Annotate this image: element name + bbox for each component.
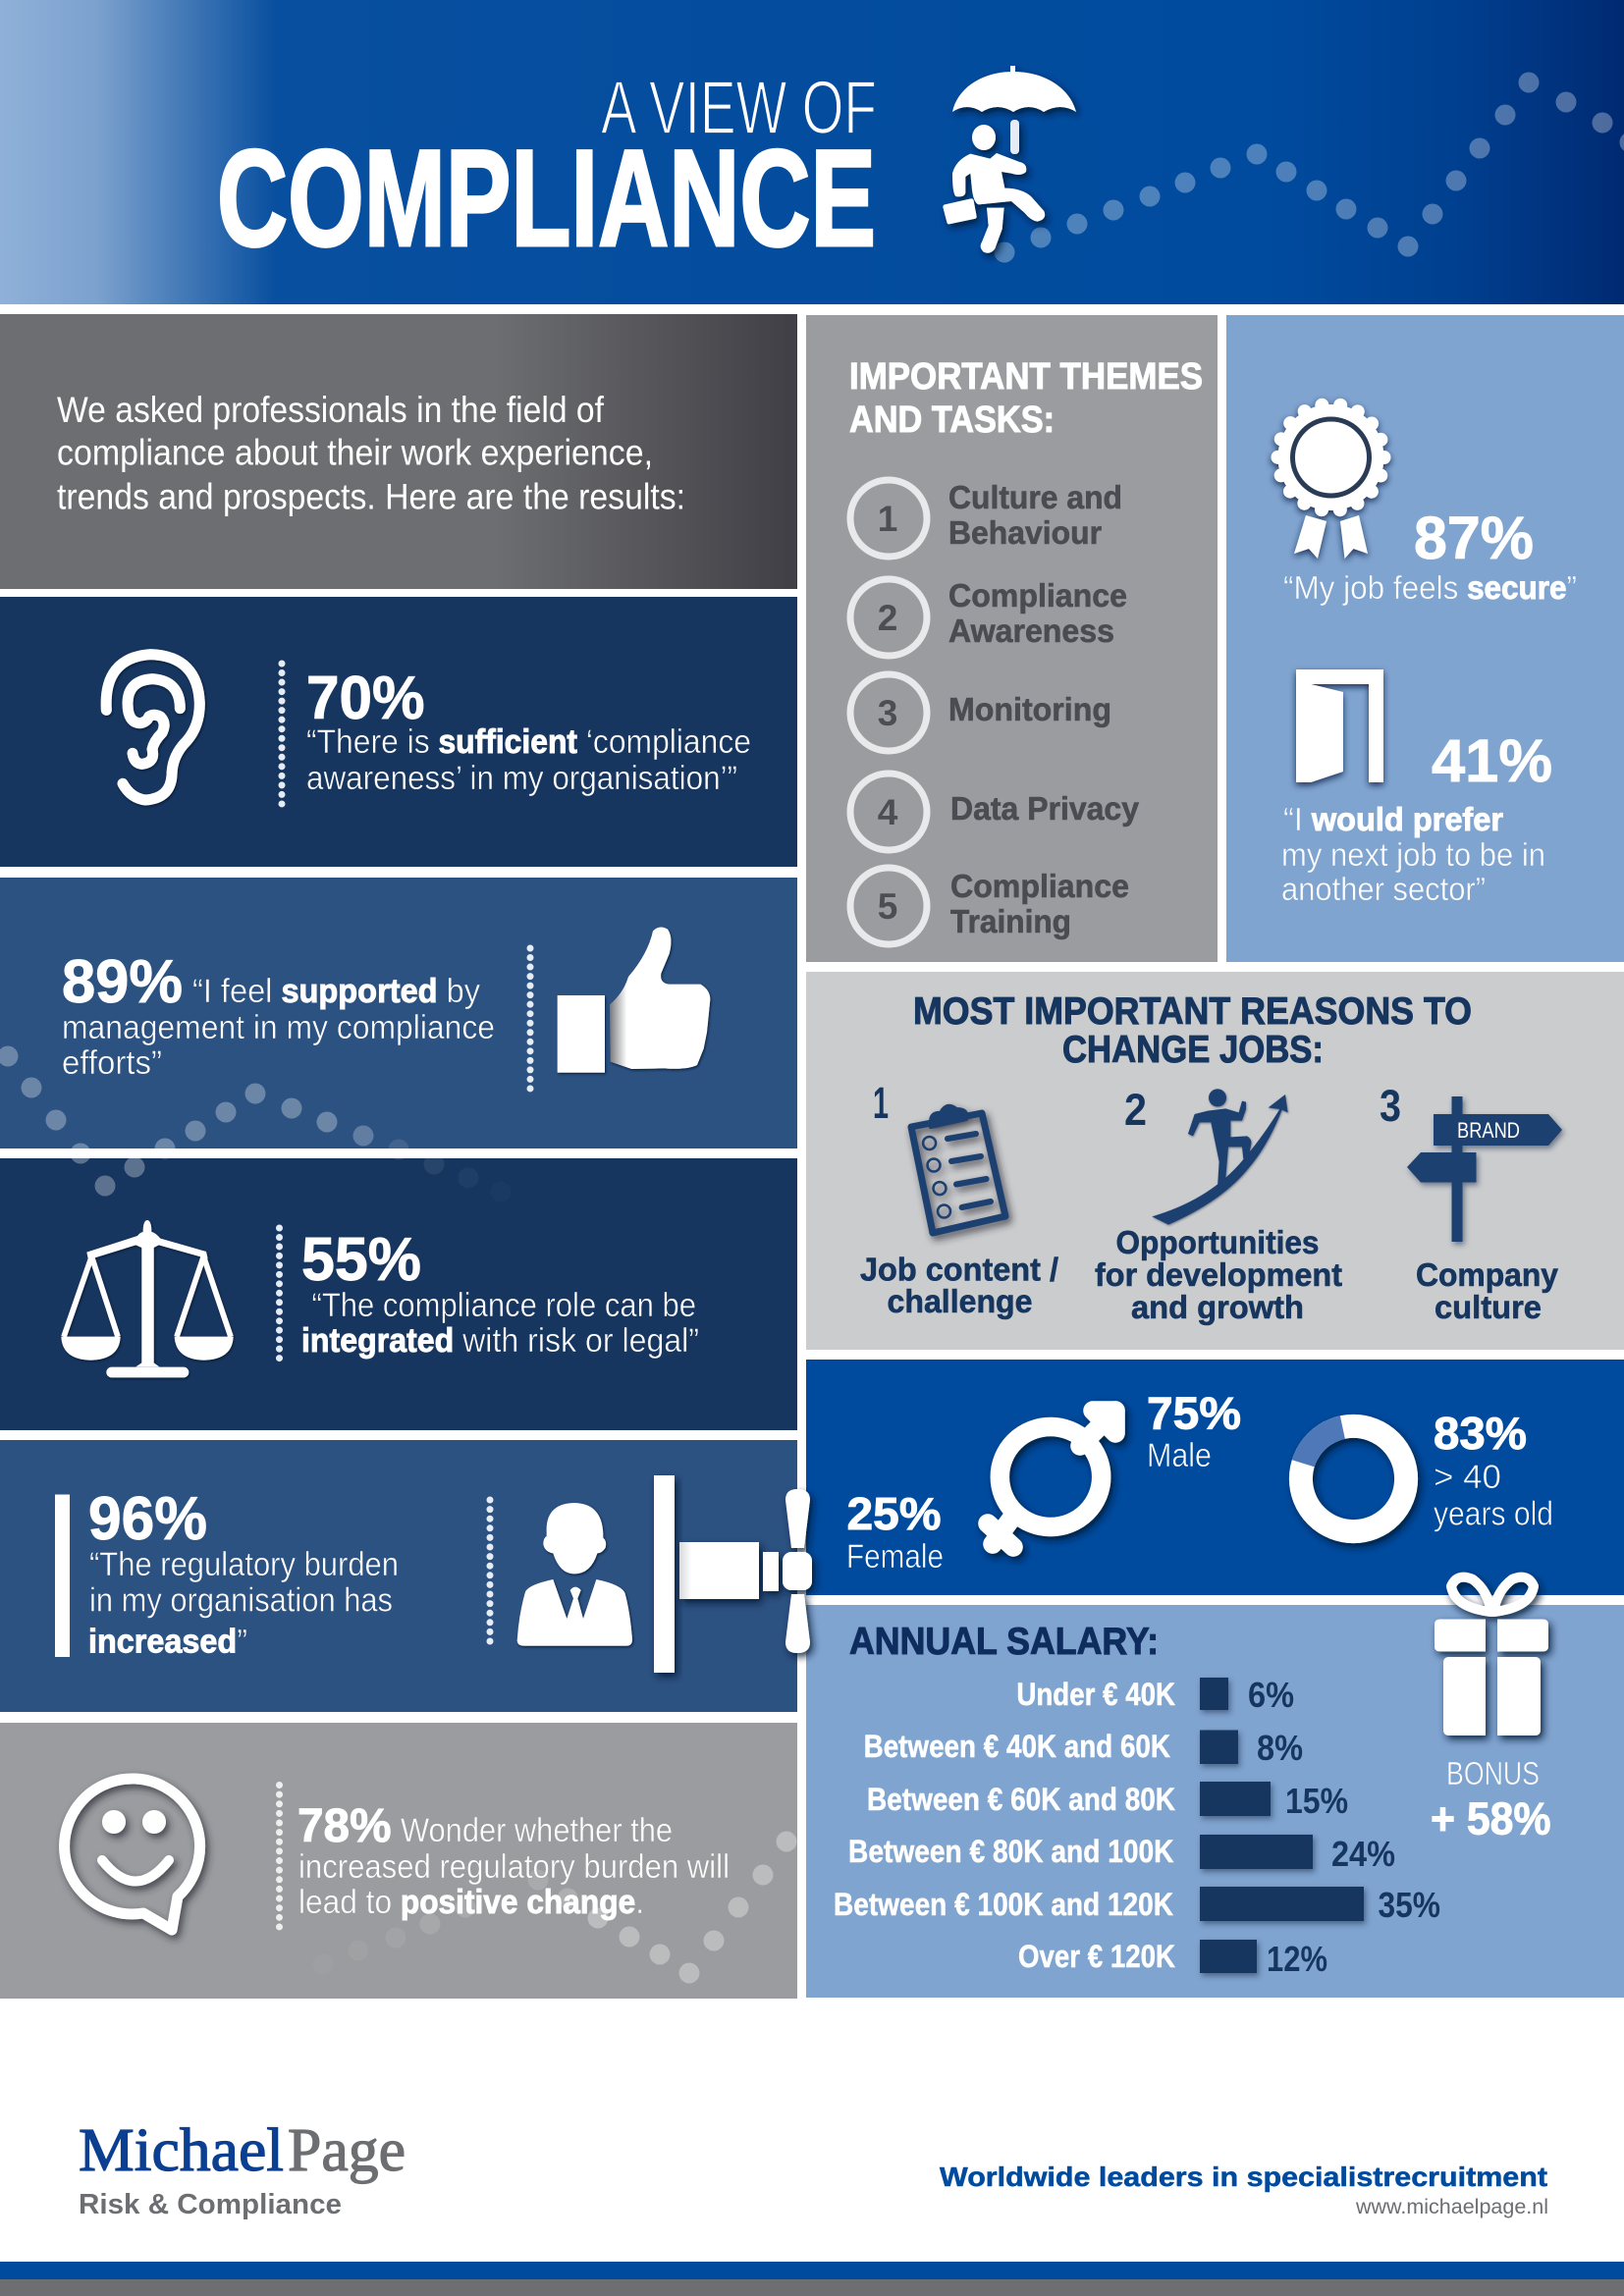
stat: 70 percent: “There is sufficient ‘compliance <box>306 723 751 761</box>
stat: age <box>1434 1408 1553 1533</box>
circle numbers <box>878 499 898 927</box>
salary percentages <box>1248 1675 1440 1979</box>
theme labels: Behaviour <box>948 514 1102 551</box>
salary percentages: 15% <box>1285 1781 1348 1821</box>
icon: barrier wall <box>654 1475 675 1673</box>
panel: 70 percent awareness <box>0 597 797 867</box>
stat: 55 percent: “The compliance role can be <box>312 1287 696 1324</box>
stat: female: Female <box>846 1538 944 1575</box>
icon: clipboard <box>911 1106 1005 1233</box>
reason labels <box>860 1224 1559 1325</box>
icon: ear <box>106 655 199 800</box>
title: A VIEW OF <box>601 66 877 150</box>
logo: Michael Page: Page <box>288 2117 406 2184</box>
footer tagline: Worldwide leaders in specialistrecruitment <box>940 2162 1547 2192</box>
stat: 70 percent: awareness’ in my organisation’” <box>306 760 737 797</box>
stat: 41 percent: my next job to be in <box>1281 836 1545 873</box>
icon: thumbs up <box>558 928 710 1073</box>
reason numbers: 1 <box>873 1078 889 1128</box>
logo: Michael Page: Risk & Compliance <box>79 2189 342 2220</box>
circle numbers: 1 <box>878 499 897 539</box>
footer tagline <box>940 2162 1548 2218</box>
stat: 89 percent: 89% <box>62 948 183 1016</box>
icon: gender symbol <box>988 1411 1115 1547</box>
reason labels: for development <box>1095 1256 1342 1293</box>
stat: 70 percent <box>306 665 751 797</box>
stat: 89 percent: “I feel supported by <box>192 973 480 1010</box>
panel: introduction <box>0 314 797 589</box>
panel: 89 percent supported <box>0 878 797 1148</box>
title <box>217 66 877 275</box>
circle numbers: 3 <box>878 693 897 733</box>
stat: 96 percent: 96% <box>88 1485 207 1553</box>
reason numbers <box>873 1078 1401 1135</box>
circle numbers: 5 <box>878 886 897 927</box>
theme labels: Training <box>950 903 1071 939</box>
intro text: trends and prospects. Here are the results: <box>57 477 685 516</box>
theme labels <box>948 479 1140 939</box>
reason labels: Company <box>1416 1256 1559 1293</box>
logo: Michael Page <box>79 2117 406 2220</box>
heading: reasons: CHANGE JOBS: <box>1062 1029 1324 1071</box>
icon: smiley speech bubble <box>65 1779 200 1930</box>
stat: 96 percent: “The regulatory burden <box>89 1546 399 1583</box>
salary percentages: 8% <box>1257 1728 1303 1768</box>
title: COMPLIANCE <box>217 121 876 275</box>
stat: 89 percent <box>62 948 495 1082</box>
numbered circles <box>850 480 927 944</box>
theme labels: Awareness <box>948 613 1114 649</box>
stat: 96 percent <box>88 1485 399 1661</box>
icon: climber on rising arrow <box>1152 1089 1288 1225</box>
panel: job security and sector <box>1226 315 1624 962</box>
reason numbers: 2 <box>1124 1085 1147 1135</box>
icon: signpost <box>1407 1096 1562 1242</box>
panel: 78 percent positive change <box>0 1723 797 1999</box>
stat: 78 percent: 78% <box>298 1800 391 1852</box>
reason labels: culture <box>1435 1289 1542 1325</box>
intro text: We asked professionals in the field of <box>57 390 605 430</box>
stat: 70 percent: 70% <box>306 665 424 732</box>
icon: businessman under umbrella <box>946 66 1076 253</box>
accent bar <box>55 1494 70 1657</box>
icon: businessman <box>517 1503 632 1646</box>
theme labels: Data Privacy <box>950 790 1140 827</box>
stat: 96 percent: increased” <box>88 1624 247 1661</box>
theme labels: Compliance <box>950 868 1129 904</box>
stat: female: 25% <box>846 1488 941 1539</box>
heading: themes <box>849 356 1203 441</box>
footer tagline: www.michaelpage.nl <box>1355 2196 1548 2218</box>
stat: 89 percent: management in my compliance <box>62 1009 495 1046</box>
salary percentages: 24% <box>1331 1834 1395 1874</box>
salary range labels: Between € 60K and 80K <box>867 1782 1175 1817</box>
theme labels: Compliance <box>948 577 1127 614</box>
stat: female <box>846 1488 944 1575</box>
stat: 78 percent: Wonder whether the <box>401 1812 673 1849</box>
theme labels: Culture and <box>948 479 1122 515</box>
stat: 78 percent: increased regulatory burden will <box>298 1848 730 1886</box>
panel: demographics <box>806 1360 1624 1595</box>
heading: themes: IMPORTANT THEMES <box>849 356 1203 398</box>
reason labels: and growth <box>1131 1289 1304 1325</box>
stat: 87 percent <box>1283 505 1577 606</box>
intro text: compliance about their work experience, <box>57 432 653 473</box>
salary range labels: Over € 120K <box>1018 1939 1175 1974</box>
stat: age: years old <box>1434 1496 1553 1533</box>
stat: bonus: BONUS <box>1446 1755 1540 1791</box>
theme labels: Monitoring <box>948 691 1111 727</box>
panel: important themes and tasks <box>806 315 1218 962</box>
salary range labels <box>834 1677 1175 1974</box>
logo: Michael Page: Michael <box>79 2117 284 2184</box>
panel: 55 percent integrated <box>0 1158 797 1430</box>
stat: 78 percent <box>298 1800 730 1921</box>
footer bars <box>0 2262 1624 2296</box>
stat: bonus: + 58% <box>1431 1792 1551 1843</box>
intro text <box>57 390 685 516</box>
salary range labels: Under € 40K <box>1016 1677 1175 1712</box>
panel: 96 percent regulatory burden <box>0 1440 797 1712</box>
stat: age: 83% <box>1434 1408 1527 1459</box>
salary range labels: Between € 40K and 60K <box>864 1729 1170 1764</box>
icon: gift box <box>1435 1577 1548 1735</box>
panel: annual salary <box>806 1577 1624 1998</box>
circle numbers: 2 <box>878 598 897 638</box>
heading: reasons <box>913 990 1472 1071</box>
stat: 78 percent: lead to positive change. <box>298 1884 644 1921</box>
stat: 87 percent: 87% <box>1414 505 1534 571</box>
stat: male: Male <box>1147 1437 1212 1474</box>
stat: 89 percent: efforts” <box>62 1044 162 1082</box>
salary range labels: Between € 100K and 120K <box>834 1887 1173 1922</box>
signpost label: BRAND <box>1457 1118 1520 1143</box>
salary percentages: 35% <box>1379 1885 1440 1925</box>
reason numbers: 3 <box>1380 1081 1401 1131</box>
icon: scales of justice <box>61 1220 234 1377</box>
stat: 55 percent: 55% <box>301 1226 421 1294</box>
reason labels: Opportunities <box>1115 1224 1320 1260</box>
stat: 41 percent: another sector” <box>1281 871 1486 907</box>
stat: age: > 40 <box>1434 1459 1501 1496</box>
icon: rosette <box>1278 404 1384 559</box>
stat: bonus <box>1431 1755 1551 1843</box>
heading: salary: ANNUAL SALARY: <box>849 1621 1159 1663</box>
salary percentages: 6% <box>1248 1675 1294 1715</box>
panel: header banner <box>0 0 1624 304</box>
panel: reasons to change jobs <box>806 972 1624 1350</box>
stat: 41 percent <box>1281 727 1552 907</box>
salary range labels: Between € 80K and 100K <box>848 1834 1174 1869</box>
heading: reasons: MOST IMPORTANT REASONS TO <box>913 990 1472 1033</box>
stat: male <box>1147 1388 1241 1474</box>
circle numbers: 4 <box>878 792 898 832</box>
reason labels: Job content / <box>860 1251 1058 1288</box>
stat: 55 percent <box>301 1226 699 1360</box>
chart: salary bars <box>1200 1678 1364 1973</box>
decorative dots <box>312 1832 797 1983</box>
stat: 41 percent: 41% <box>1432 727 1552 794</box>
salary percentages: 12% <box>1267 1939 1327 1979</box>
reason labels: challenge <box>888 1283 1033 1319</box>
stat: 96 percent: in my organisation has <box>89 1582 393 1620</box>
stat: 87 percent: “My job feels secure” <box>1283 569 1577 606</box>
stat: 41 percent: “I would prefer <box>1283 801 1503 837</box>
heading: themes: AND TASKS: <box>849 400 1055 441</box>
stat: male: 75% <box>1147 1388 1241 1439</box>
chart: age donut <box>1301 1426 1406 1531</box>
icon: open door <box>1296 669 1383 782</box>
icon: valve with propeller <box>679 1489 812 1653</box>
decorative dotted path <box>994 73 1624 263</box>
decorative dots across middle panels <box>0 1046 511 1201</box>
stat: 55 percent: integrated with risk or legal” <box>301 1322 699 1360</box>
